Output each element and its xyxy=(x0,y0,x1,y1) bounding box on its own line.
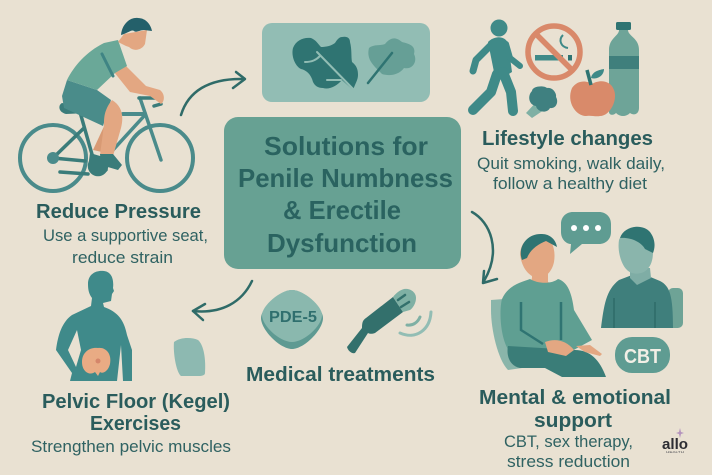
back leg xyxy=(93,122,115,152)
shorts xyxy=(62,80,111,126)
heading: pelvic floor: Pelvic Floor (Kegel) xyxy=(42,391,230,413)
icon: water bottle xyxy=(609,22,639,116)
icon: broccoli xyxy=(526,86,557,118)
heading: pelvic floor xyxy=(42,391,230,435)
icon: dark leaf xyxy=(292,37,358,90)
heading: medical treatments: Medical treatments xyxy=(246,364,435,386)
title: & Erectile xyxy=(283,195,401,225)
shirt xyxy=(67,40,127,90)
panel: medical treatments xyxy=(246,289,435,386)
icon: therapist xyxy=(601,227,683,328)
arrow: center to pelvic floor xyxy=(193,281,252,320)
heading: pelvic floor: Exercises xyxy=(90,413,181,435)
icon: walking person xyxy=(473,20,520,111)
icon: pelvis highlight xyxy=(82,348,110,376)
icon: apple xyxy=(570,69,615,116)
shoes xyxy=(100,154,122,170)
panel: mental and emotional support xyxy=(479,212,683,471)
icon: speech bubble xyxy=(561,212,611,254)
text block: mental and emotional support xyxy=(504,432,633,471)
heading: mental and emotional support: Mental & emotional xyxy=(479,387,671,409)
arrow: cycling to leaves xyxy=(181,72,245,115)
icon: no smoking xyxy=(528,26,580,78)
logo: allo health xyxy=(662,428,688,454)
panel: leafy greens xyxy=(262,23,430,102)
text block: lifestyle changes: Quit smoking, walk daily, xyxy=(477,154,665,173)
head xyxy=(118,30,147,50)
heading: mental and emotional support xyxy=(479,387,671,432)
text block: reduce pressure: Use a supportive seat, xyxy=(43,226,208,245)
heading: mental and emotional support: support xyxy=(534,410,612,432)
icon: leaf veins xyxy=(305,52,357,93)
icon: CBT badge: CBT xyxy=(624,346,661,368)
text block: mental and emotional support: stress reduction xyxy=(507,452,630,471)
arm xyxy=(114,65,164,104)
panel: lifestyle changes xyxy=(473,20,665,193)
icon: seated patient xyxy=(491,234,606,377)
panel: pelvic floor exercises xyxy=(31,271,231,456)
icon: light leaf vein xyxy=(368,53,392,83)
text block: reduce pressure xyxy=(43,226,208,267)
icon: light shape xyxy=(174,338,205,376)
panel: central title xyxy=(224,117,461,269)
title: Solutions for xyxy=(264,131,428,161)
front leg xyxy=(100,100,122,156)
icon: CBT badge xyxy=(615,337,670,373)
logo: allo health: HEALTH xyxy=(666,450,684,454)
icon: light leaf xyxy=(368,38,415,75)
panel: reduce pressure xyxy=(20,18,208,267)
icon: medical device xyxy=(347,289,431,353)
heading: reduce pressure: Reduce Pressure xyxy=(36,201,201,223)
text block: lifestyle changes: follow a healthy diet xyxy=(493,174,647,193)
arrow: center to mental support xyxy=(472,212,497,283)
text block: reduce pressure: reduce strain xyxy=(72,248,173,267)
icon: PDE-5 pill: PDE-5 xyxy=(269,309,317,326)
title xyxy=(238,131,453,258)
icon: PDE-5 pill xyxy=(261,290,323,349)
text block: pelvic floor: Strengthen pelvic muscles xyxy=(31,437,231,456)
text block: lifestyle changes xyxy=(477,154,665,193)
title: Dysfunction xyxy=(267,228,417,258)
icon: body silhouette xyxy=(56,271,132,381)
seat xyxy=(59,103,88,114)
icon: cyclist on bicycle xyxy=(20,18,193,191)
title: Penile Numbness xyxy=(238,163,453,193)
text block: mental and emotional support: CBT, sex therapy, xyxy=(504,432,633,451)
heading: lifestyle changes: Lifestyle changes xyxy=(482,128,653,150)
logo: allo health: allo xyxy=(662,436,688,453)
